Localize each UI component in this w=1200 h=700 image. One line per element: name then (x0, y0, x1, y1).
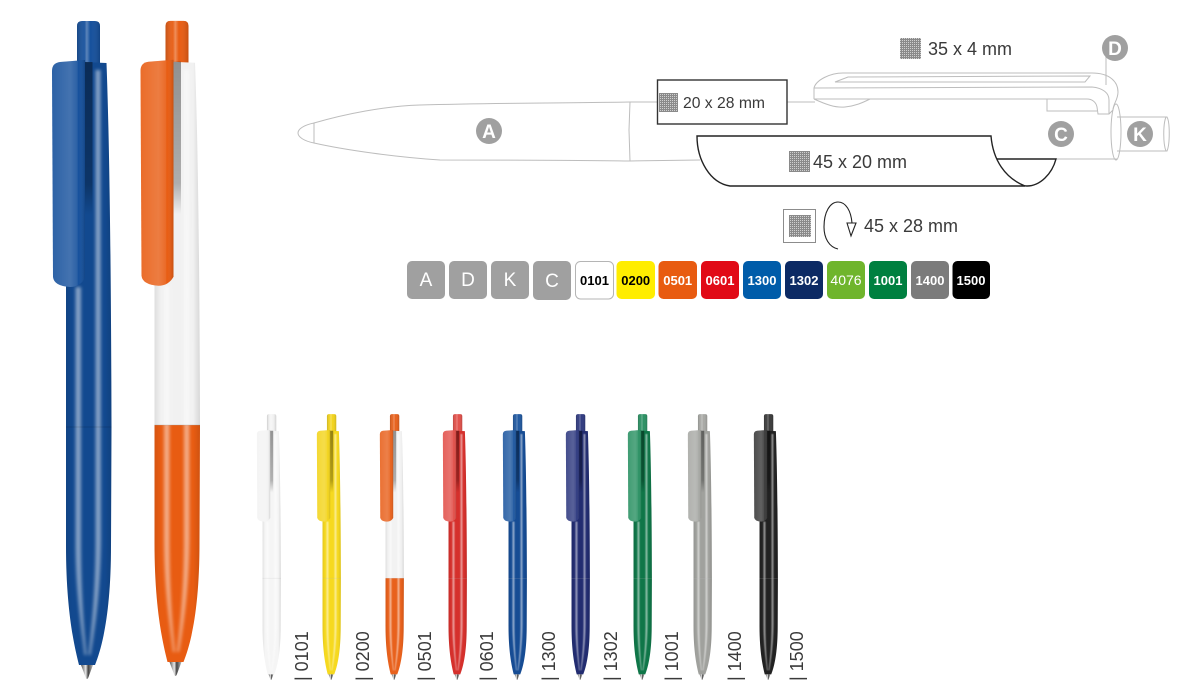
marker D (1102, 35, 1128, 61)
swatch 1400: 1400 (916, 273, 944, 288)
barrel top outline (314, 102, 815, 123)
code 0501: | 0501 (415, 631, 435, 681)
swatch 1500: 1500 (957, 273, 985, 288)
small pen 0200 yellow (317, 414, 341, 680)
hatch swatch (659, 93, 678, 112)
small pen 1500 black (754, 414, 778, 680)
marker K (1127, 121, 1153, 147)
print area: clip 35 x 4 mm (900, 38, 1012, 59)
code 1500: | 1500 (787, 631, 807, 681)
dimension text: 45 x 28 mm (864, 216, 958, 236)
dimension text: 20 x 28 mm (683, 95, 765, 112)
swatch D (449, 261, 487, 299)
marker C: C (1054, 125, 1068, 146)
large pen: orange and white (140, 21, 200, 676)
swatch D: D (461, 270, 475, 291)
swatch 1302 (785, 261, 823, 299)
code 1400: | 1400 (725, 631, 745, 681)
swatch 1300: 1300 (748, 273, 776, 288)
swatch 0101 (576, 262, 614, 299)
small pen 1001 green (628, 414, 652, 680)
lower barrel line (1055, 158, 1117, 160)
marker A: A (482, 122, 496, 143)
code 0601: | 0601 (477, 631, 497, 681)
swatch 0200 (616, 261, 655, 299)
swatch A: A (420, 270, 433, 291)
swatch A (407, 261, 445, 299)
swatch 4076 (827, 261, 865, 299)
code 0200: | 0200 (353, 631, 373, 681)
swatch K (491, 261, 529, 299)
swatch 1400 (911, 261, 949, 299)
swatch K: K (504, 270, 517, 291)
technical line drawing of pen (298, 57, 1169, 161)
push button outline (1117, 117, 1169, 151)
small pen 0101 white (257, 414, 281, 680)
swatch 1001 (869, 261, 907, 299)
swatch 0200: 0200 (621, 273, 650, 288)
dimension text: 45 x 20 mm (813, 152, 907, 172)
code 1302: | 1302 (601, 631, 621, 681)
dimension text: 35 x 4 mm (928, 39, 1012, 59)
marker A (476, 118, 502, 144)
swatch C (533, 261, 571, 300)
barrel bottom outline (314, 143, 700, 161)
print area: wrap 45 x 20 mm (697, 136, 1056, 186)
swatch 1500 (952, 261, 990, 299)
clip base outline (1047, 99, 1097, 111)
small pen 1302 navy (566, 414, 590, 680)
barrel divider (629, 102, 630, 161)
tip divider (313, 123, 315, 143)
rotation arrow (824, 202, 856, 249)
print area: barrel box 20 x 28 mm (658, 80, 787, 124)
small pen 1300 blue (503, 414, 527, 680)
swatch 1300 (743, 261, 781, 299)
swatch 1001: 1001 (874, 273, 902, 288)
ring outline (1111, 104, 1121, 160)
ballpoint tip outline (298, 123, 314, 143)
swatch 0101: 0101 (580, 273, 609, 288)
swatch 0501: 0501 (663, 273, 692, 288)
swatch 1302: 1302 (790, 273, 818, 288)
swatch 0601: 0601 (706, 273, 734, 288)
swatch 0501 (658, 261, 697, 299)
print area: rotary 45 x 28 mm (784, 202, 958, 249)
hatch swatch (789, 151, 810, 172)
colour swatch row (407, 261, 990, 300)
swatch 4076: 4076 (830, 272, 862, 288)
leader line to D (1105, 57, 1107, 85)
code 1300: | 1300 (539, 631, 559, 681)
marker D: D (1108, 39, 1122, 60)
large pen: blue (52, 21, 112, 679)
code 0101: | 0101 (292, 631, 312, 681)
small pen 0601 red (443, 414, 467, 680)
marker K: K (1133, 125, 1147, 146)
marker C (1048, 121, 1074, 147)
small pen 1400 grey (688, 414, 712, 680)
code 1001: | 1001 (662, 631, 682, 681)
swatch C: C (545, 271, 559, 292)
vertical colour code labels (292, 631, 807, 681)
clip outline (814, 73, 1118, 114)
swatch 0601 (701, 261, 739, 299)
square swatch (784, 210, 816, 242)
small pen 0501 orange and white (380, 414, 404, 680)
